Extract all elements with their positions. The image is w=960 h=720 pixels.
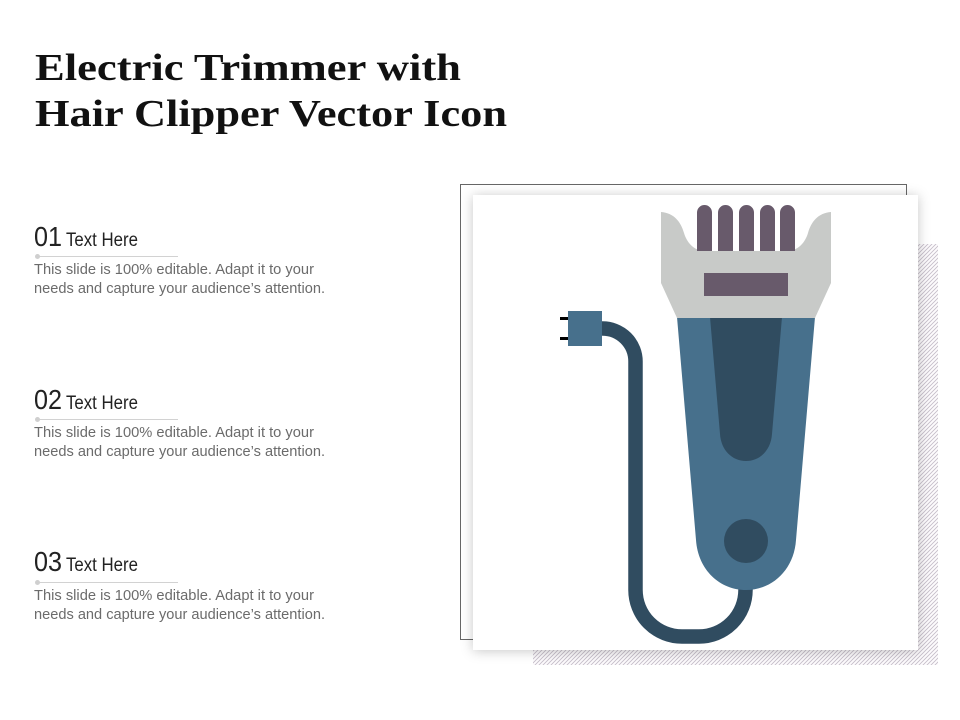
- item 03: needs and capture your audience’s attention.: [34, 607, 325, 623]
- title: Hair Clipper Vector Icon: [35, 93, 507, 135]
- outlined frame: [460, 184, 906, 640]
- item 02: needs and capture your audience’s attention.: [34, 444, 325, 460]
- item 03: This slide is 100% editable. Adapt it to your: [34, 588, 314, 604]
- power cord: [600, 328, 746, 636]
- item 01: 01: [34, 221, 62, 252]
- head slot: [704, 273, 788, 296]
- item 01: This slide is 100% editable. Adapt it to your: [34, 262, 314, 278]
- item 02: 02: [34, 384, 62, 415]
- title: Electric Trimmer with: [35, 47, 461, 89]
- hatched backdrop: [533, 244, 938, 665]
- item 02: Text Here: [66, 392, 138, 414]
- item 01: needs and capture your audience’s attention.: [34, 281, 325, 297]
- item 03: 03: [34, 546, 62, 577]
- item 01: Text Here: [66, 229, 138, 251]
- white card: [473, 195, 918, 650]
- item 03: [34, 546, 325, 623]
- icon: electric trimmer: [560, 205, 831, 636]
- item 01: [34, 221, 325, 297]
- item 02: This slide is 100% editable. Adapt it to your: [34, 425, 314, 441]
- title: [35, 47, 507, 135]
- clipper body: [677, 317, 815, 590]
- clipper head: [661, 212, 831, 318]
- plug: [568, 311, 602, 346]
- item 03: Text Here: [66, 554, 138, 576]
- body inset: [710, 317, 782, 461]
- item 02: [34, 384, 325, 460]
- power button: [724, 519, 768, 563]
- blade teeth: [697, 205, 795, 251]
- plug pins: [560, 317, 569, 340]
